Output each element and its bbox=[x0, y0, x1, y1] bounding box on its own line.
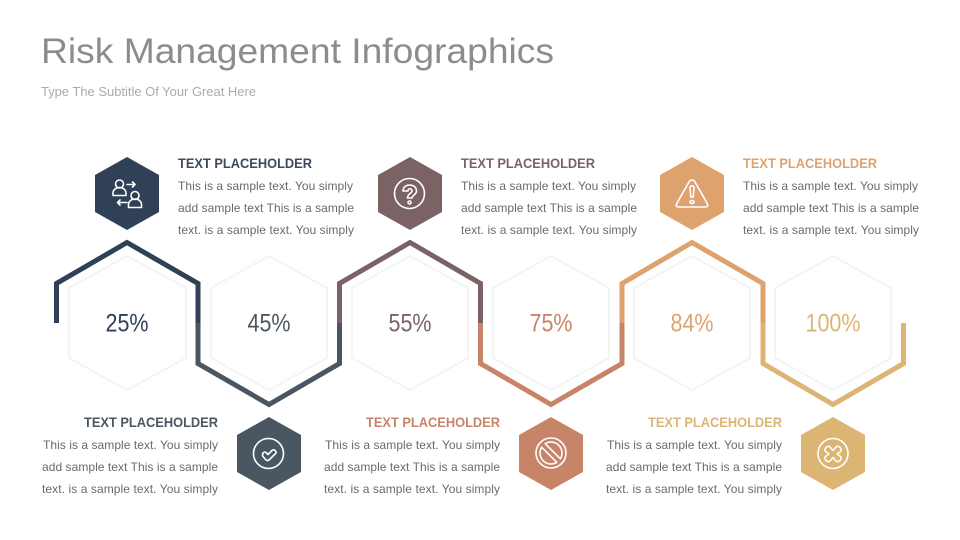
percentage hexagon: 100%: 100% bbox=[806, 310, 860, 338]
text block: top 1: text. is a sample text. You simply bbox=[178, 223, 354, 237]
text block: bottom 3: This is a sample text. You simply bbox=[607, 438, 782, 452]
text block: bottom 2: add sample text This is a sample bbox=[324, 460, 500, 474]
percentage hexagon: 45%: 45% bbox=[248, 310, 290, 338]
text block: bottom 2: This is a sample text. You simply bbox=[325, 438, 500, 452]
text block: top 3: add sample text This is a sample bbox=[743, 201, 919, 215]
text block: bottom 3: text. is a sample text. You simply bbox=[606, 482, 782, 496]
line segment: gold bbox=[763, 323, 904, 404]
percentage hexagon: 25%: 25% bbox=[106, 310, 148, 338]
text block: bottom 2: text. is a sample text. You simply bbox=[324, 482, 500, 496]
text block: bottom 2 bbox=[324, 414, 500, 496]
percentage hexagon: 75% bbox=[493, 256, 609, 390]
percentage hexagon: 55%: 55% bbox=[388, 310, 432, 338]
text block: top 1: TEXT PLACEHOLDER bbox=[178, 155, 312, 171]
text block: bottom 3: TEXT PLACEHOLDER bbox=[648, 414, 782, 430]
text block: bottom 1 bbox=[42, 414, 218, 496]
text block: bottom 1: add sample text This is a sample bbox=[42, 460, 218, 474]
text block: top 1: add sample text This is a sample bbox=[178, 201, 354, 215]
text block: bottom 1: TEXT PLACEHOLDER bbox=[84, 414, 218, 430]
text block: top 2: This is a sample text. You simply bbox=[461, 179, 636, 193]
percentage hexagon: 55% bbox=[352, 256, 468, 390]
text block: bottom 3 bbox=[606, 414, 782, 496]
percentage hexagon: 45% bbox=[211, 256, 327, 390]
text block: top 1 bbox=[178, 155, 354, 237]
icon hexagon: prohibited bbox=[519, 417, 583, 490]
line segment: terracotta bbox=[480, 323, 622, 404]
percentage hexagon: 25% bbox=[69, 256, 186, 390]
text block: bottom 3: add sample text This is a sample bbox=[606, 460, 782, 474]
text block: top 2: text. is a sample text. You simply bbox=[461, 223, 637, 237]
text block: top 1: This is a sample text. You simply bbox=[178, 179, 353, 193]
text block: top 3 bbox=[743, 155, 919, 237]
icon hexagon: people exchange bbox=[95, 157, 159, 230]
title: Risk Management Infographics bbox=[41, 31, 554, 71]
percentage hexagon: 100% bbox=[775, 256, 891, 390]
text block: top 3: TEXT PLACEHOLDER bbox=[743, 155, 877, 171]
text block: top 3: This is a sample text. You simply bbox=[743, 179, 918, 193]
percentage hexagon: 84%: 84% bbox=[670, 310, 714, 338]
percentage hexagon: 84% bbox=[634, 256, 750, 390]
hexagon chain of percentages bbox=[56, 242, 904, 404]
percentage hexagon: 75%: 75% bbox=[530, 310, 572, 338]
line segment: mauve bbox=[340, 242, 480, 323]
icon hexagon: warning bbox=[660, 157, 724, 230]
text block: top 3: text. is a sample text. You simply bbox=[743, 223, 919, 237]
text block: top 2 bbox=[461, 155, 637, 237]
line segment: slate bbox=[198, 323, 340, 404]
text block: bottom 1: text. is a sample text. You simply bbox=[42, 482, 218, 496]
text block: top 2: TEXT PLACEHOLDER bbox=[461, 155, 595, 171]
icon hexagon: question bbox=[378, 157, 442, 230]
text block: bottom 1: This is a sample text. You simply bbox=[43, 438, 218, 452]
text block: bottom 2: TEXT PLACEHOLDER bbox=[366, 414, 500, 430]
icon hexagon: cross bbox=[801, 417, 865, 490]
subtitle: Type The Subtitle Of Your Great Here bbox=[41, 85, 256, 99]
line segment: navy bbox=[56, 242, 198, 323]
line segment: orange bbox=[622, 242, 763, 323]
icon hexagon: check bbox=[237, 417, 301, 490]
text block: top 2: add sample text This is a sample bbox=[461, 201, 637, 215]
